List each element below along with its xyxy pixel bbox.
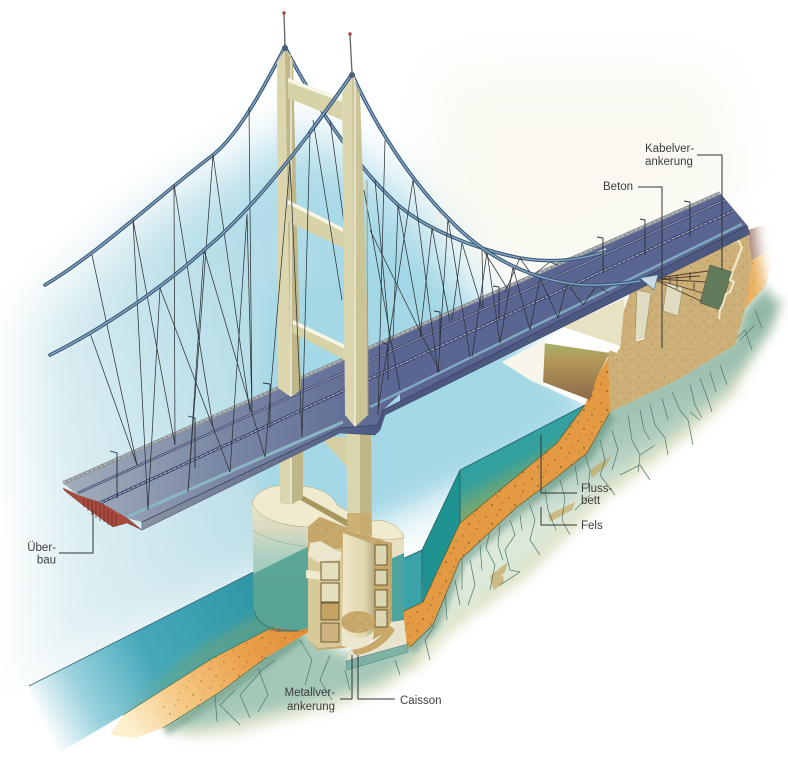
bridge abutment bbox=[502, 298, 625, 404]
caisson foot bbox=[342, 630, 374, 650]
rear tower upper legs bbox=[277, 50, 301, 397]
tower cross beams bbox=[288, 78, 345, 360]
front tower upper legs bbox=[342, 77, 368, 427]
cable to anchorage socket bbox=[640, 275, 658, 290]
label: Überbau: bau bbox=[37, 554, 56, 566]
pier inner slot bbox=[297, 494, 362, 533]
left cells bbox=[321, 562, 339, 642]
rear cable bbox=[45, 47, 605, 285]
label: Kabelverankerung bbox=[645, 143, 722, 270]
pier right lobe body bbox=[388, 533, 404, 625]
label: Kabelverankerung: ankerung bbox=[645, 156, 693, 168]
water line bbox=[29, 560, 277, 686]
label: Überbau: Über- bbox=[27, 542, 56, 554]
label: Metallverankerung: Metallver- bbox=[285, 687, 335, 699]
label: Metallverankerung bbox=[285, 655, 352, 713]
label: Kabelverankerung: Kabelver- bbox=[645, 143, 694, 155]
antenna masts bbox=[282, 11, 352, 73]
label: Caisson: Caisson bbox=[400, 695, 442, 707]
deck rails and service strips bbox=[63, 193, 747, 522]
central shaft bbox=[342, 533, 374, 642]
shaft floor sand fill bbox=[341, 611, 375, 633]
foundation ring bbox=[346, 644, 408, 670]
cut section sand walls bbox=[308, 517, 392, 650]
front cable bbox=[50, 74, 640, 355]
label: Beton: Beton bbox=[603, 181, 633, 193]
roadway surface, far half bbox=[400, 193, 747, 402]
label: Beton bbox=[603, 181, 662, 348]
pier top surface bbox=[252, 485, 404, 540]
right cells bbox=[375, 545, 387, 627]
riverbed orange sediment, left bbox=[110, 612, 312, 738]
riverbed teal water wall, left bbox=[29, 545, 310, 757]
label: Caisson bbox=[358, 655, 442, 707]
rock green shade below river sediment bbox=[165, 414, 610, 730]
cable anchor plate bbox=[700, 265, 734, 319]
bridge pier caisson bbox=[252, 485, 408, 670]
riverbed teal water wall, right bbox=[400, 405, 585, 613]
deck fascia bbox=[142, 225, 750, 530]
anchorage chamber slots bbox=[635, 283, 683, 340]
anchor cable strands bbox=[657, 271, 708, 301]
rear tower lower legs bbox=[279, 440, 303, 505]
anchorage conduit bbox=[687, 240, 742, 273]
left cell wall bbox=[308, 548, 342, 648]
label: Flussbett bbox=[541, 435, 612, 507]
street lamps bbox=[110, 201, 690, 498]
cable saddle, cable top reattach bbox=[282, 45, 355, 132]
label: Metallverankerung: ankerung bbox=[287, 701, 335, 713]
far bank end layers bbox=[735, 222, 778, 345]
far end fade bbox=[752, 170, 788, 300]
strata patches bbox=[272, 455, 612, 648]
front tower lower legs bbox=[320, 430, 372, 536]
label: Überbau bbox=[27, 510, 93, 566]
label: Fels: Fels bbox=[581, 520, 603, 532]
label: Flussbett: bett bbox=[581, 495, 601, 507]
hanger cables bbox=[90, 107, 608, 510]
sky and water surface wash bbox=[28, 70, 740, 690]
rock bedrock bbox=[165, 285, 785, 738]
concrete anchorage block bbox=[608, 230, 752, 412]
white service bar bbox=[588, 249, 606, 257]
riverbed teal green blend bbox=[123, 598, 310, 715]
bridge deck bbox=[63, 193, 750, 530]
riverbed orange sediment, right bbox=[398, 355, 610, 652]
pier left lobe body bbox=[252, 502, 312, 630]
roadway surface, near half bbox=[63, 333, 400, 522]
rock cracks bbox=[215, 310, 762, 725]
label: Flussbett: Fluss- bbox=[581, 483, 612, 495]
deck superstructure end, red steel box bbox=[63, 488, 142, 530]
label: Fels bbox=[541, 507, 603, 532]
